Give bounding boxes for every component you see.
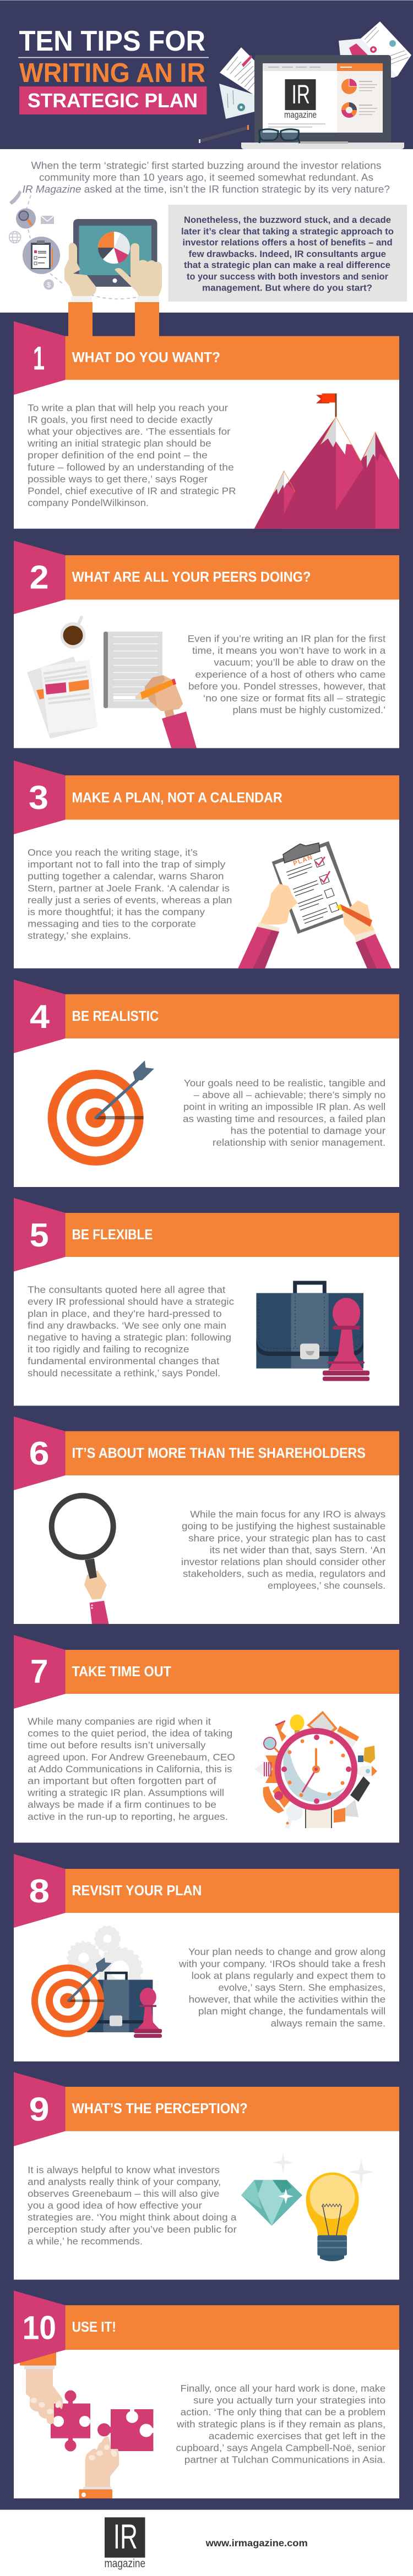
tip 7 body: an important but often forgotten part of <box>28 1775 216 1786</box>
icon: book <box>305 1808 332 1828</box>
tip 1 heading: WHAT DO YOU WANT? <box>72 350 220 365</box>
illustration: glasses <box>259 129 300 143</box>
tip 5 number: 5 <box>30 1217 49 1254</box>
icon: flask <box>285 1804 303 1829</box>
tip 1 body: IR goals, you first need to decide exactly <box>28 414 213 425</box>
tip 9 heading: WHAT’S THE PERCEPTION? <box>72 2101 248 2116</box>
footer logo: magazine <box>105 2557 145 2570</box>
tip 3 tag <box>14 761 66 834</box>
illustration: laptop <box>241 55 404 149</box>
icon: magnifier <box>264 1737 280 1753</box>
tip 4 body <box>183 1078 385 1148</box>
tip 4 body: relationship with senior management. <box>213 1137 385 1148</box>
tip 7 body: always be made if a firm continues to be <box>28 1799 216 1810</box>
icon: trophy <box>358 1746 375 1763</box>
tip 8 body: look at plans regularly and expect them to <box>192 1970 385 1981</box>
tip 2 body <box>188 633 385 715</box>
tip 3 heading band <box>66 775 399 820</box>
tip 4 tag <box>14 980 66 1053</box>
tip 3 heading: MAKE A PLAN, NOT A CALENDAR <box>72 790 282 806</box>
tip 9 body: It is always helpful to know what investors <box>28 2164 220 2175</box>
callout text: later it’s clear that taking a strategic approach to <box>181 227 394 237</box>
tip 7 heading band <box>66 1650 399 1694</box>
callout text: investor relations offers a host of benefits – and <box>183 238 393 248</box>
footer logo: IR <box>113 2518 138 2556</box>
tip 7 body: time out before results isn’t universally <box>28 1740 206 1751</box>
footer url: www.irmagazine.com <box>205 2537 308 2548</box>
tip 9 body: and analysts really think of your company, <box>28 2176 221 2187</box>
tip 9 body: strategies are. ‘You might think about doing a <box>28 2212 237 2223</box>
tip 5 body: fundamental environmental changes that <box>28 1355 220 1366</box>
tip 6 tag <box>14 1416 66 1490</box>
tip 10 body: Finally, once all your hard work is done, make <box>181 2383 385 2394</box>
tip 10 body <box>176 2383 385 2465</box>
tip 10 number: 10 <box>23 2309 56 2347</box>
tip 9 tag <box>14 2072 66 2146</box>
tip 10 body: cupboard,’ says Angela Campbell-Noë, senior <box>176 2442 385 2453</box>
intro text <box>23 160 390 195</box>
tip 3 body: Stern, partner at Joele Frank. ‘A calendar is <box>28 883 230 894</box>
lower sleeve <box>83 2487 111 2490</box>
title: writing an IR: WRITING AN IR <box>19 58 205 88</box>
intro text: IR Magazine asked at the time, isn’t the IR function strategic by its very nature? <box>23 184 390 195</box>
tip 8 tag <box>14 1854 66 1928</box>
illustration: magnifying glass in hand <box>52 1496 113 1624</box>
arms reaching into tip 1 <box>68 302 159 337</box>
tip 2 body: plans must be highly customized.’ <box>232 704 385 715</box>
tip 1 body <box>27 402 236 508</box>
tip 8 body <box>178 1946 385 2028</box>
tip 9 body: you a good idea of how effective your <box>28 2200 202 2211</box>
tip 4 heading band <box>66 994 399 1038</box>
tip 6 body <box>181 1509 385 1591</box>
icon: magnifier circle <box>16 208 36 229</box>
tip 3 number: 3 <box>29 779 48 816</box>
icon: clipboard circle <box>23 237 60 274</box>
tip 8 body: always remain the same. <box>271 2017 385 2028</box>
illustration: clock surrounded by business icons <box>254 1711 377 1829</box>
tip 7 heading: TAKE TIME OUT <box>72 1664 171 1680</box>
tip 2 heading: WHAT ARE ALL YOUR PEERS DOING? <box>72 570 311 585</box>
illustration: clipboard plan with hands: PLAN <box>292 854 314 867</box>
tip 6 body: stakeholders, such as media, regulators and <box>183 1568 385 1579</box>
tip 6 heading: IT’S ABOUT MORE THAN THE SHAREHOLDERS <box>72 1446 366 1461</box>
tip 3 body: is more thoughtful; it has the company <box>28 906 205 917</box>
tip 4 number: 4 <box>30 998 50 1035</box>
tip 5 tag <box>14 1198 66 1272</box>
tablet pie chart <box>98 232 130 264</box>
tip 3 body: important not to fall into the trap of simply <box>28 859 226 870</box>
icon: hourglass <box>275 1721 286 1742</box>
tip 9 body: perception study after you’ve been public for <box>28 2224 237 2235</box>
icon: calendar <box>333 1726 359 1751</box>
tip 2 body: time, it means you won’t have to work in a <box>192 645 385 656</box>
tip 5 heading band <box>66 1213 399 1257</box>
tip 8 body: plan might change, the fundamentals will <box>198 2006 385 2017</box>
tip 3 body: Once you reach the writing stage, it’s <box>28 847 198 858</box>
tip 5 body <box>28 1284 234 1379</box>
tip 6 body: employees,’ she counsels. <box>268 1580 385 1591</box>
tip 3 body: strategy,’ she explains. <box>28 930 131 941</box>
tip 6 body: investor relations plan should consider other <box>181 1556 385 1567</box>
pawn <box>134 1988 162 2038</box>
panel: tip 10 <box>14 2290 399 2498</box>
tip 1 body: Pondel, chief executive of IR and strategic PR <box>28 485 236 496</box>
tip 5 body: find any drawbacks. ‘We see only one main <box>28 1320 226 1331</box>
tip 9 body: a while,’ he recommends. <box>28 2235 143 2246</box>
callout text: that a strategic plan can make a real difference <box>184 260 390 270</box>
tip 7 number: 7 <box>30 1653 48 1689</box>
tip 10 heading band <box>66 2305 399 2350</box>
tip 5 body: negative to having a strategic plan: following <box>28 1332 231 1343</box>
clock face <box>278 1731 355 1807</box>
callout text: Nonetheless, the buzzword stuck, and a decade <box>184 215 391 225</box>
icon: dollar: $ <box>47 281 51 289</box>
tip 9 number: 9 <box>29 2091 50 2127</box>
illustration: diamond and light bulb <box>241 2152 374 2261</box>
icon: phone <box>9 190 21 205</box>
icon: document <box>307 1711 338 1739</box>
callout text: management. But where do you start? <box>202 283 372 293</box>
tip 2 body: vacuum; you’ll be able to draw on the <box>214 657 385 668</box>
title: strategic plan box: STRATEGIC PLAN <box>28 89 198 112</box>
icon: telephone <box>263 1782 292 1813</box>
tip 1 heading band <box>66 336 399 380</box>
illustration: desk with coffee, papers, notebook, writing hand <box>27 617 197 748</box>
icon: dollar <box>44 280 54 289</box>
illustration: papers behind laptop <box>219 21 411 119</box>
panel: tip 2 <box>14 540 399 748</box>
panel: tip 6 <box>14 1416 399 1624</box>
tip 1 body: possible ways to get there,’ says Roger <box>28 473 208 484</box>
illustration: clipboard plan with hands <box>238 841 392 969</box>
tip 6 body: While the main focus for any IRO is always <box>190 1509 385 1520</box>
icon: envelope and arrow <box>254 1755 278 1783</box>
tip 2 body: experience of a host of others who came <box>195 669 385 680</box>
lower puzzle piece <box>97 2409 154 2451</box>
upper sleeve <box>20 2350 56 2365</box>
screen logo: IR <box>292 80 310 110</box>
tip 6 body: going to be justifying the highest sustainable <box>182 1521 385 1532</box>
panel: tip 7 <box>14 1635 399 1842</box>
tip 7 body: agreed upon. For Andrew Greenebaum, CEO <box>28 1752 235 1763</box>
tip 7 body: at Addo Communications in California, this is <box>28 1763 232 1774</box>
tip 10 heading: USE IT! <box>72 2320 116 2335</box>
tip 8 number: 8 <box>29 1873 50 1910</box>
tip 2 body: ‘no one size or format fits all – strategic <box>203 692 385 703</box>
tip 3 body: really just a series of events, whereas a plan <box>28 894 232 905</box>
screen charts <box>341 79 377 118</box>
panel: intro callout <box>169 205 407 302</box>
tip 1 tag <box>14 321 66 395</box>
intro text: When the term ‘strategic’ first started buzzing around the investor relations <box>31 160 381 171</box>
icon: bulb <box>290 1715 304 1735</box>
tip 1 body: company PondelWilkinson. <box>28 497 149 508</box>
illustration: mountains with flag <box>254 393 399 529</box>
illustration: briefcase and pawn <box>256 1283 369 1381</box>
upper puzzle piece <box>51 2391 90 2451</box>
tip 1 number: 1 <box>33 340 45 376</box>
callout text: to your success with both investors and senior <box>187 272 389 282</box>
tip 9 heading band <box>66 2087 399 2131</box>
panel: tip 4 <box>14 980 399 1187</box>
sparkles <box>273 2152 374 2186</box>
tip 6 body: its net wider than that, says Stern. ‘An <box>210 1544 385 1555</box>
tip 2 heading band <box>66 555 399 600</box>
gears <box>68 1927 142 1992</box>
panel: tip 1 <box>14 321 399 529</box>
tip 1 body: writing an initial strategic plan should be <box>27 438 211 449</box>
tip 2 tag <box>14 540 66 614</box>
callout text: few drawbacks. Indeed, IR consultants argue <box>188 249 386 259</box>
tip 4 body: – above all – achievable; there’s simply no <box>194 1090 385 1101</box>
diamond <box>241 2180 302 2225</box>
icon: dark briefcase <box>350 1776 370 1802</box>
panel: header banner <box>0 0 413 149</box>
tip 4 body: point in writing an impossible IR plan. As well <box>183 1101 385 1112</box>
illustration: business icons and tablet in hands <box>9 190 162 302</box>
illustration: hands joining puzzle pieces <box>20 2350 154 2498</box>
tip 6 body: share price, your strategic plan has to cast <box>188 1533 385 1544</box>
tip 2 body: before you. Pondel stresses, however, that <box>188 681 385 692</box>
panel: tip 8 <box>14 1854 399 2061</box>
tip 8 body: Your plan needs to change and grow along <box>188 1946 385 1957</box>
icon: envelope <box>41 216 54 224</box>
icon: globe <box>9 231 21 243</box>
tip 8 heading band <box>66 1869 399 1913</box>
lower hand <box>85 2436 119 2487</box>
tip 10 body: with strategic plans is if they remain as plans, <box>176 2419 385 2430</box>
briefcase <box>87 1973 153 2032</box>
left hand <box>64 243 96 296</box>
tip 5 body: it too rigidly and failing to recognize <box>28 1344 189 1355</box>
screen logo <box>284 79 317 120</box>
tip 10 body: sure you actually turn your strategies into <box>193 2395 385 2406</box>
tip 2 body: Even if you’re writing an IR plan for the first <box>188 633 385 644</box>
tip 5 body: should necessitate a rethink,’ says Pondel. <box>28 1368 220 1379</box>
tip 6 number: 6 <box>29 1435 50 1472</box>
tip 7 body: While many companies are rigid when it <box>28 1716 211 1727</box>
intro text: community more than 10 years ago, it seemed somewhat redundant. As <box>39 172 373 183</box>
tip 1 body: proper definition of the end point – the <box>28 450 208 461</box>
tip 8 body: with your company. ‘IROs should take a fresh <box>178 1958 385 1969</box>
tip 7 body: comes to the quiet period, the idea of taking <box>28 1728 232 1739</box>
tip 4 body: as wasting time and resources, a failed plan <box>183 1113 385 1124</box>
upper hand <box>26 2369 63 2424</box>
tip 10 body: partner at Tulchan Communications in Asia. <box>184 2454 385 2465</box>
tip 9 body <box>28 2164 237 2246</box>
tip 3 body: putting together a calendar, warns Sharon <box>28 871 224 882</box>
tip 8 body: evolve,’ says Stern. She emphasizes, <box>218 1982 385 1993</box>
shirt cuffs <box>71 296 159 302</box>
tip 6 heading band <box>66 1431 399 1475</box>
tip 8 body: however, that while the activities within the <box>188 1994 385 2005</box>
panel: tip 5 <box>14 1198 399 1405</box>
footer logo <box>105 2517 145 2570</box>
tip 7 body <box>27 1716 235 1822</box>
title: ten tips for: TEN TIPS FOR <box>19 25 205 57</box>
tip 4 body: has the potential to damage your <box>230 1125 385 1136</box>
callout text <box>181 215 394 293</box>
illustration: pencil <box>199 125 249 143</box>
panel: tip 3 <box>14 761 399 969</box>
bulb <box>306 2173 359 2261</box>
tip 4 heading: BE REALISTIC <box>72 1009 159 1024</box>
tablet <box>73 219 157 287</box>
tip 2 number: 2 <box>30 559 49 595</box>
icon: megaphone <box>334 1800 358 1823</box>
tip 10 body: action. ‘The only thing that can be a problem <box>181 2407 385 2418</box>
tip 10 body: academic exercises that get left in the <box>209 2430 385 2441</box>
tip 5 heading: BE FLEXIBLE <box>72 1227 153 1243</box>
tip 1 body: what your objectives are. ‘The essentials for <box>27 426 231 437</box>
right hand <box>115 243 162 296</box>
tip 7 tag <box>14 1635 66 1709</box>
icon: rocket <box>356 1765 377 1776</box>
tip 7 body: active in the run-up to reporting, he argues. <box>28 1811 228 1822</box>
screen logo: magazine <box>284 110 317 120</box>
tip 10 tag <box>14 2290 66 2365</box>
tip 9 body: observes Greenebaum – this will also give <box>28 2188 219 2199</box>
tip 3 body: messaging and ties to the corporate <box>28 918 196 929</box>
panel: tip 9 <box>14 2072 399 2279</box>
tip 5 body: every IR professional should have a strategic <box>28 1296 234 1307</box>
tip 5 body: plan in place, and they’re hard-pressed to <box>28 1308 222 1319</box>
tip 4 body: Your goals need to be realistic, tangible and <box>184 1078 385 1089</box>
tip 1 body: To write a plan that will help you reach your <box>28 402 228 413</box>
illustration: target with arrow <box>48 1060 154 1166</box>
tip 3 body <box>28 847 232 941</box>
tip 5 body: The consultants quoted here all agree that <box>28 1284 226 1295</box>
illustration: gears, target, briefcase, pawn <box>31 1927 162 2038</box>
dashed connector <box>26 195 137 299</box>
tip 1 body: future – followed by an understanding of the <box>28 462 234 473</box>
tip 8 heading: REVISIT YOUR PLAN <box>72 1883 202 1899</box>
tip 7 body: writing a strategic IR plan. Assumptions will <box>27 1787 224 1798</box>
target <box>31 1957 112 2037</box>
